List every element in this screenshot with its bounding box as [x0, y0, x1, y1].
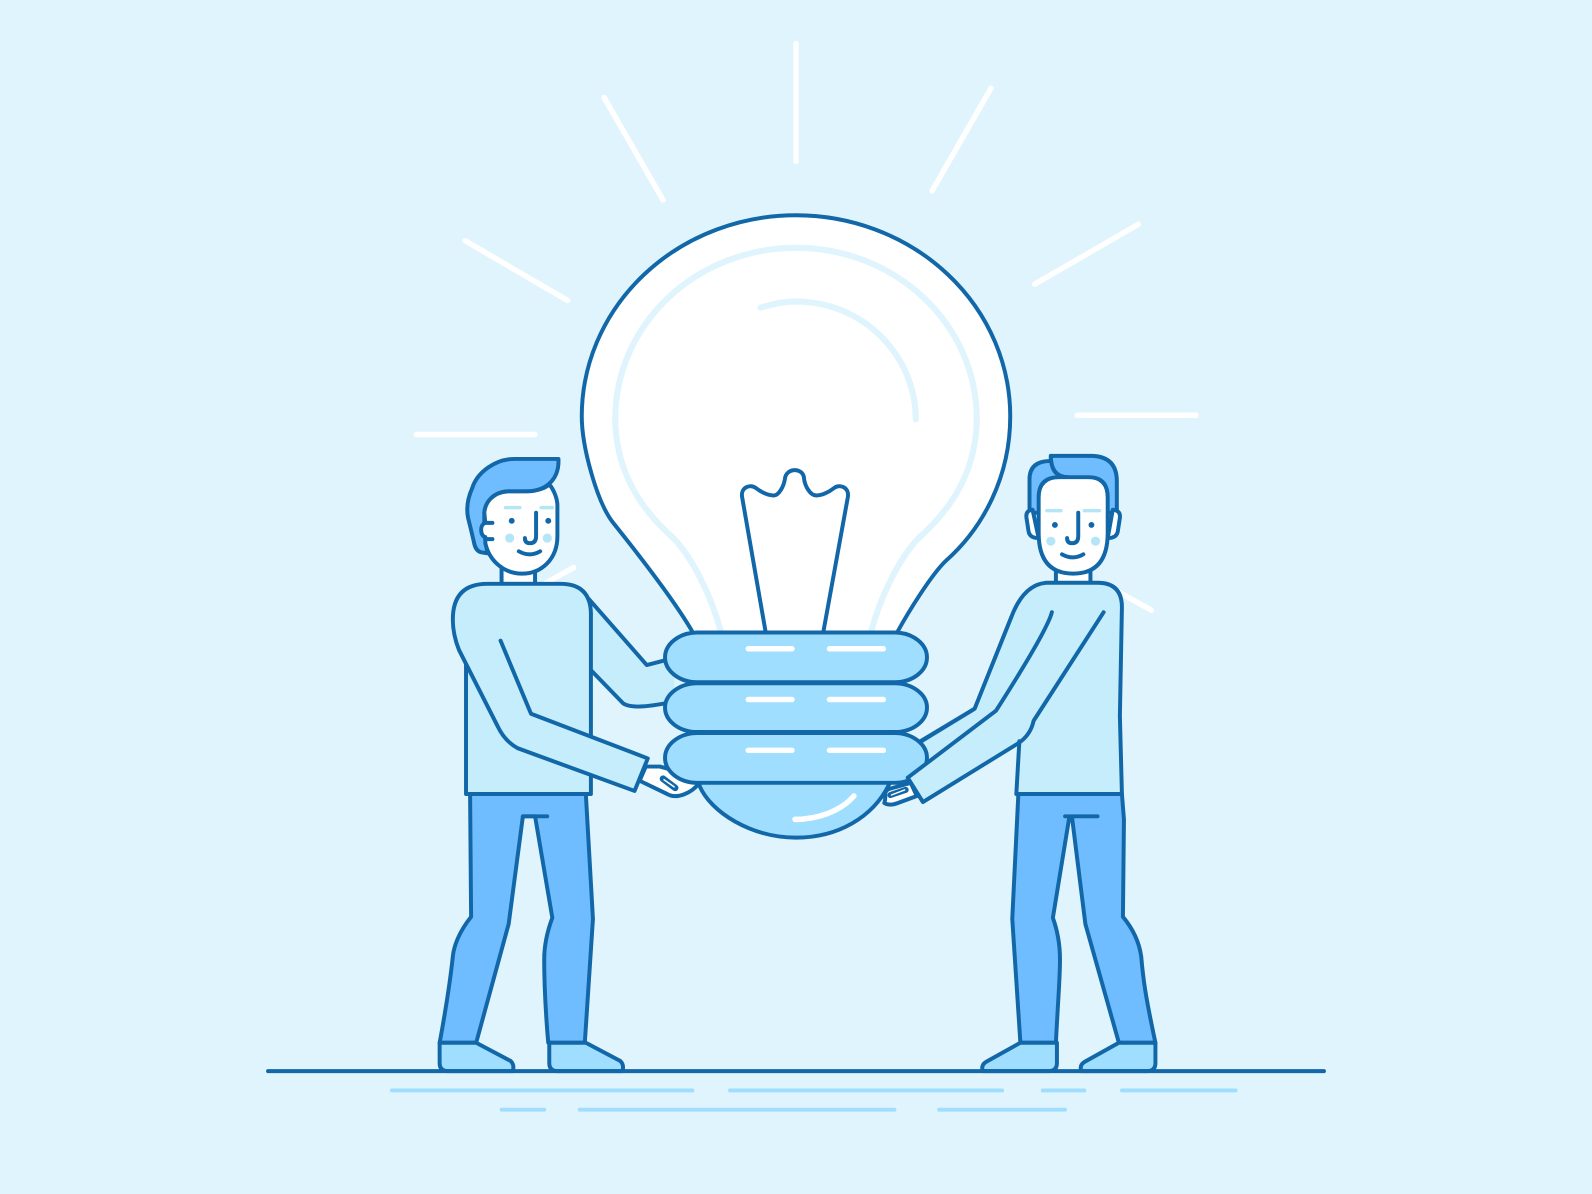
right person shoes [982, 1043, 1155, 1071]
glass highlight [760, 302, 916, 419]
right person mouth [1062, 554, 1083, 557]
right person pants [1012, 794, 1155, 1043]
left person ear lines [486, 523, 492, 539]
screw ring top [665, 633, 927, 682]
screw ring bottom [665, 733, 927, 783]
right person eyes [1052, 522, 1094, 528]
ground line [268, 1069, 1324, 1073]
left person shoes [440, 1043, 623, 1071]
ring highlights [748, 748, 883, 753]
left person neck [502, 560, 535, 584]
bulb bottom cap [700, 780, 889, 838]
left person eyebrows [506, 506, 552, 509]
right person cheeks [1046, 537, 1100, 546]
right person eyebrows [1047, 509, 1100, 512]
left person pants [440, 794, 593, 1043]
right person forelock line [1051, 456, 1068, 477]
right person torso outline [920, 583, 1122, 794]
right person belt line [1065, 814, 1098, 818]
left person belt line [523, 814, 547, 818]
right person finger [890, 790, 906, 795]
ring highlights [748, 646, 883, 651]
filament [742, 470, 848, 632]
left person cheeks [505, 534, 552, 543]
left person face [481, 484, 557, 574]
right person torso and arm fill [908, 583, 1122, 802]
right person ears [1026, 510, 1120, 538]
cap highlight [795, 796, 854, 819]
right person [884, 456, 1155, 1071]
inner glow line [615, 248, 977, 632]
ring highlights [748, 697, 883, 702]
left hand finger [663, 779, 675, 788]
left person back arm [589, 599, 674, 707]
floor accent lines [392, 1090, 1236, 1110]
right person neck [1056, 560, 1090, 584]
left person torso [466, 614, 591, 794]
right person face [1039, 477, 1108, 574]
left person hair [467, 459, 558, 553]
right person hand [884, 783, 917, 805]
left person mouth [519, 551, 540, 554]
right person front arm outline [908, 612, 1104, 802]
left hand [640, 767, 699, 796]
right person nose [1067, 513, 1078, 543]
left person front arm outline [453, 584, 648, 791]
bulb outline [582, 215, 1010, 634]
right person hair [1030, 456, 1117, 513]
light bulb glass [582, 215, 1010, 634]
left person front arm fill [453, 584, 648, 791]
left person [440, 459, 648, 1071]
left person eyes [509, 518, 551, 524]
light rays [416, 44, 1196, 610]
left person nose [525, 513, 536, 543]
right person back arm [914, 617, 1015, 772]
screw ring middle [665, 683, 927, 732]
